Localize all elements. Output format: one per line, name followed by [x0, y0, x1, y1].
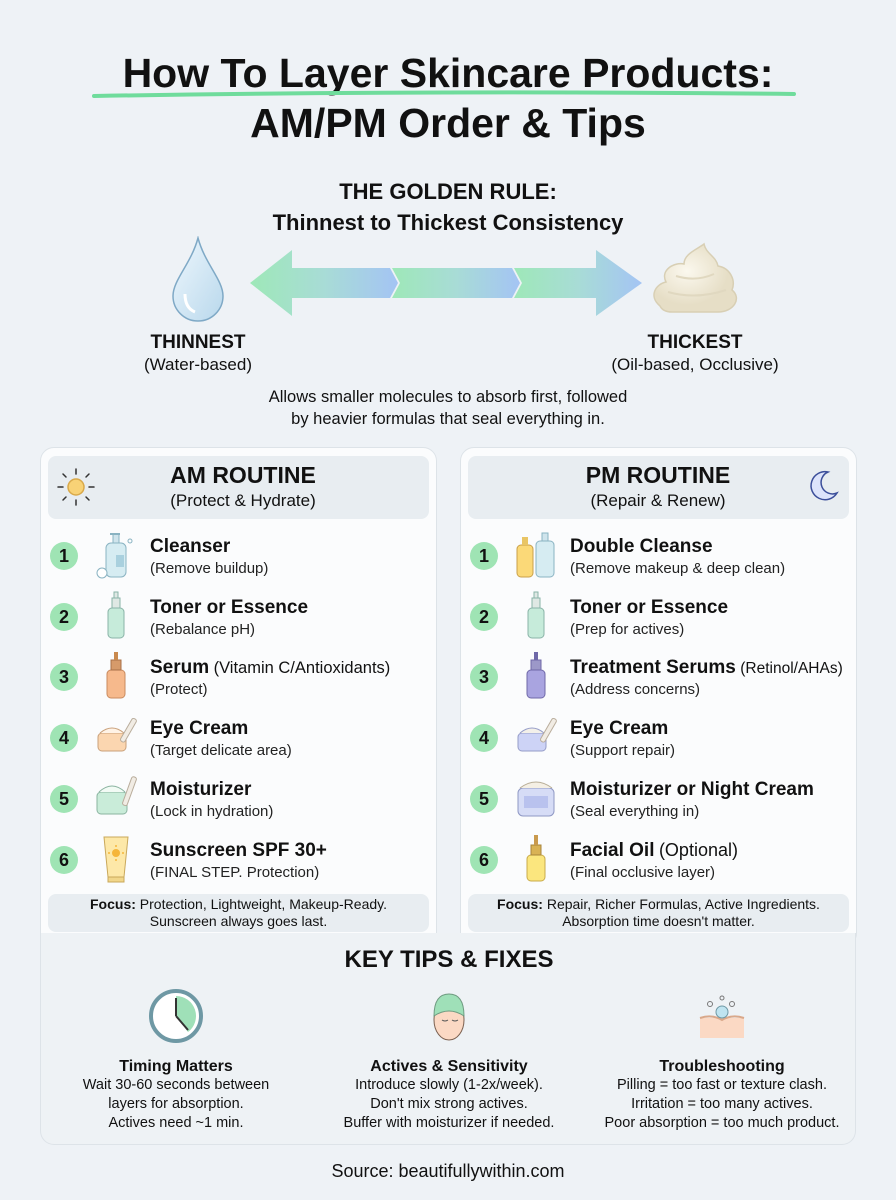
AM header: (Protect & Hydrate): [170, 491, 316, 510]
tip: timing: Wait 30-60 seconds between: [83, 1077, 269, 1093]
step 3 serum: [50, 652, 390, 698]
step 6 facial oil: 6: [479, 850, 489, 870]
step 1 double cleanse: (Remove makeup & deep clean): [570, 560, 785, 577]
step 3 treatment serums: [470, 652, 843, 698]
step 1 double cleanse: 1: [479, 546, 489, 566]
panel: AM routine: [40, 447, 437, 947]
step 4 eye cream: [50, 718, 292, 759]
label: thickest: THICKEST: [648, 332, 742, 353]
step 2 toner: 2: [479, 607, 489, 627]
step 1 cleanser: Cleanser: [150, 536, 230, 557]
step 5 moisturizer: 5: [59, 789, 69, 809]
step 3 treatment serums: (Address concerns): [570, 681, 700, 698]
step 5 moisturizer: Moisturizer: [150, 779, 251, 800]
step 2 toner: (Prep for actives): [570, 621, 684, 638]
AM focus: Sunscreen always goes last.: [150, 913, 327, 929]
label: thickest: [611, 332, 779, 374]
step 3 serum: Serum (Vitamin C/Antioxidants): [150, 657, 390, 678]
step 6 facial oil: [470, 835, 738, 882]
step 6 sunscreen: 6: [59, 850, 69, 870]
icon: skin layer: [700, 996, 744, 1038]
tips heading: KEY TIPS & FIXES: [345, 946, 553, 973]
step 4 eye cream: (Support repair): [570, 742, 675, 759]
step 3 treatment serums: Treatment Serums (Retinol/AHAs): [570, 657, 843, 678]
explanation text: [268, 388, 627, 428]
explanation text: Allows smaller molecules to absorb first, followed: [269, 388, 627, 406]
step 6 facial oil: (Final occlusive layer): [570, 864, 715, 881]
step 5 moisturizer: (Lock in hydration): [150, 803, 273, 820]
step 1 double cleanse: [470, 532, 785, 578]
tip: troubleshooting: [605, 996, 839, 1131]
panel: PM routine: [460, 447, 857, 947]
step 4 eye cream: Eye Cream: [570, 718, 668, 739]
title: How To Layer Skincare Products:: [123, 50, 773, 96]
PM steps: [470, 532, 843, 882]
title: AM/PM Order & Tips: [250, 100, 646, 146]
label: thinnest: THINNEST: [150, 332, 246, 353]
AM focus: Focus: Protection, Lightweight, Makeup-Ready.: [90, 896, 387, 912]
AM steps: [50, 533, 390, 882]
icon: face: [434, 994, 464, 1040]
label: thinnest: (Water-based): [144, 355, 252, 374]
step 3 serum: (Protect): [150, 681, 208, 698]
icon: moon: [810, 470, 839, 500]
tip: troubleshooting: Irritation = too many actives.: [631, 1096, 813, 1112]
step 2 toner: 2: [59, 607, 69, 627]
step 3 serum: 3: [59, 667, 69, 687]
tip: troubleshooting: Poor absorption = too much product.: [605, 1115, 839, 1131]
tip: timing: [82, 989, 269, 1131]
step 6 sunscreen: (FINAL STEP. Protection): [150, 864, 319, 881]
PM header: PM ROUTINE: [586, 462, 730, 488]
step 5 night cream: Moisturizer or Night Cream: [570, 779, 814, 800]
step 6 facial oil: Facial Oil (Optional): [570, 840, 738, 861]
tip: actives: [344, 994, 554, 1131]
tip: actives: Don't mix strong actives.: [370, 1096, 528, 1112]
step 3 treatment serums: 3: [479, 667, 489, 687]
PM header: (Repair & Renew): [590, 491, 726, 510]
arrow: thin to thick: [250, 250, 642, 316]
PM header: [468, 456, 849, 519]
tip: timing: Timing Matters: [119, 1058, 233, 1075]
step 2 toner: Toner or Essence: [570, 597, 728, 618]
tip: actives: Buffer with moisturizer if needed.: [344, 1115, 554, 1131]
step 1 cleanser: (Remove buildup): [150, 560, 268, 577]
step 6 sunscreen: [50, 836, 327, 882]
explanation text: by heavier formulas that seal everything in.: [291, 410, 605, 428]
panel: key tips: [40, 933, 856, 1145]
PM focus: Focus: Repair, Richer Formulas, Active Ingredients.: [497, 896, 820, 912]
step 4 eye cream: (Target delicate area): [150, 742, 292, 759]
step 4 eye cream: 4: [479, 728, 489, 748]
step 6 sunscreen: Sunscreen SPF 30+: [150, 840, 327, 861]
label: thinnest: [144, 332, 252, 374]
step 4 eye cream: [470, 718, 675, 759]
step 4 eye cream: Eye Cream: [150, 718, 248, 739]
tip: troubleshooting: Troubleshooting: [659, 1058, 785, 1075]
AM header: [48, 456, 429, 519]
tip: actives: Actives & Sensitivity: [370, 1058, 528, 1075]
label: thickest: (Oil-based, Occlusive): [611, 355, 779, 374]
step 2 toner: [470, 592, 728, 638]
title: [123, 50, 773, 146]
PM focus: Absorption time doesn't matter.: [562, 913, 755, 929]
icon: cream swirl: [653, 242, 738, 313]
step 5 night cream: 5: [479, 789, 489, 809]
tip: timing: layers for absorption.: [108, 1096, 244, 1112]
golden rule heading: THE GOLDEN RULE:: [339, 179, 557, 204]
step 2 toner: [50, 592, 308, 638]
icon: sun: [57, 468, 95, 506]
step 2 toner: (Rebalance pH): [150, 621, 255, 638]
tip: actives: Introduce slowly (1-2x/week).: [355, 1077, 543, 1093]
icon: water drop: [172, 236, 224, 322]
title underline: [92, 90, 796, 98]
tip: timing: Actives need ~1 min.: [108, 1115, 244, 1131]
step 5 night cream: [470, 779, 814, 820]
AM focus: [48, 894, 429, 932]
tip: troubleshooting: Pilling = too fast or texture clash.: [617, 1077, 827, 1093]
step 1 cleanser: 1: [59, 546, 69, 566]
step 1 cleanser: [50, 533, 268, 578]
step 5 night cream: (Seal everything in): [570, 803, 699, 820]
source: Source: beautifullywithin.com: [331, 1161, 565, 1181]
step 4 eye cream: 4: [59, 728, 69, 748]
PM focus: [468, 894, 849, 932]
step 1 double cleanse: Double Cleanse: [570, 536, 713, 557]
golden rule heading: Thinnest to Thickest Consistency: [273, 210, 623, 235]
AM header: AM ROUTINE: [170, 462, 316, 488]
step 5 moisturizer: [50, 776, 273, 820]
step 2 toner: Toner or Essence: [150, 597, 308, 618]
icon: clock: [149, 989, 203, 1043]
golden rule heading: [272, 179, 624, 235]
